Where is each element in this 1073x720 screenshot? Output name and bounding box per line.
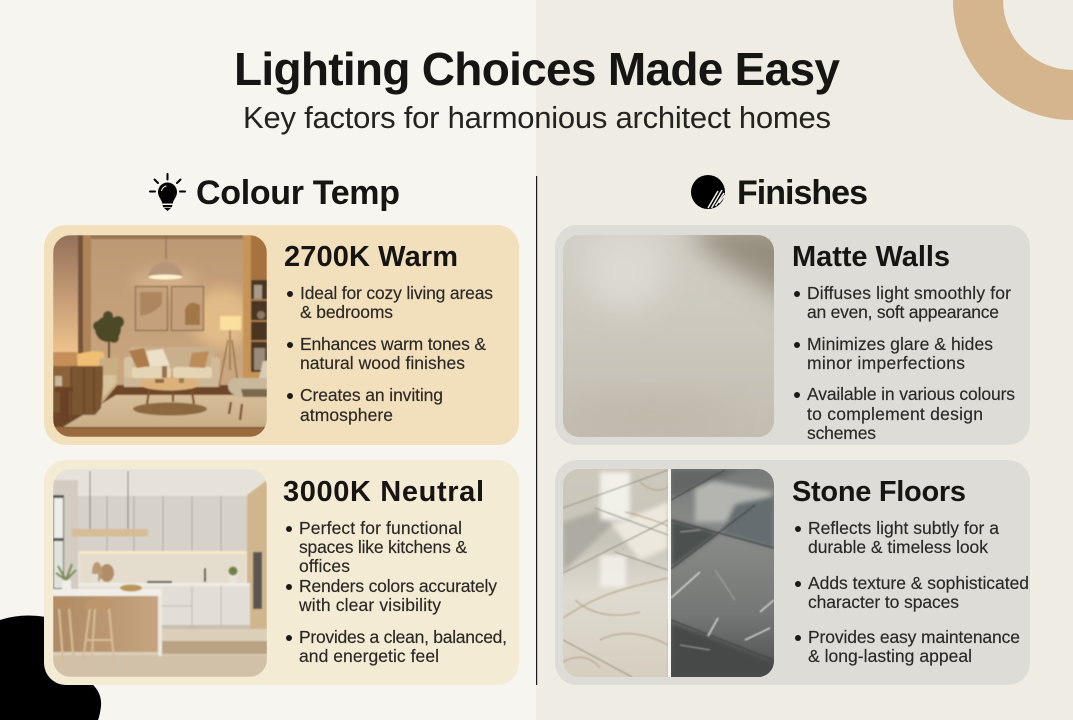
heading: finishes: Finishes [737,174,868,212]
bullet: maintenance [795,627,1020,666]
bullet: texture: character to spaces [808,592,959,612]
bullet: texture: Adds texture & sophisticated [808,573,1029,593]
heading: 2700K Warm [284,241,458,273]
bullet: balanced feel: and energetic feel [299,646,439,666]
bullet: maintenance: Provides easy maintenance [808,627,1020,647]
bullet list [795,518,1029,666]
panel: stone floors [555,460,1030,685]
decorative ring top right [953,0,1073,120]
bullet: functional spaces [286,518,467,576]
panel: 3000K neutral [44,460,519,685]
image: matte wall texture [563,235,774,437]
bullet: warm tones: Enhances warm tones & [300,334,486,354]
bullet: functional spaces: spaces like kitchens & [299,537,467,557]
bullet: cozy areas: & bedrooms [300,302,393,322]
icon: shaded sphere [691,175,725,209]
armchair [259,361,267,381]
image: kitchen [53,469,267,677]
bullet: minimizes glare [794,334,993,373]
bullet: balanced feel [286,627,507,666]
title: Lighting Choices Made Easy [234,43,840,95]
bullet: diffuses light: an even, soft appearance [807,302,999,322]
subtitle: Key factors for harmonious architect homes [243,100,831,135]
panel: matte walls [555,225,1030,445]
bullet: accurate colours: with clear visibility [298,595,441,615]
bullet: minimizes glare: Minimizes glare & hides [807,334,993,354]
bullet: minimizes glare: minor imperfections [807,353,965,373]
bullet: accurate colours: Renders colors accurately [299,576,497,596]
bullet: various colours: to complement design [807,404,983,424]
bullet: maintenance: & long-lasting appeal [808,646,972,666]
heading: 3000K Neutral [283,476,484,508]
bullet: atmosphere [287,385,443,425]
bullet: diffuses light: Diffuses light smoothly for [807,283,1011,303]
bullet: atmosphere: Creates an inviting [300,385,443,405]
center divider [536,176,537,685]
icon: light bulb [150,174,185,211]
bullet: cozy areas [287,283,493,322]
bullet: functional spaces: Perfect for functional [299,518,462,538]
bullet list [794,283,1015,443]
heading: colour temp: Colour Temp [196,174,400,212]
bullet: various colours: schemes [807,423,876,443]
bullet: diffuses light [794,283,1011,322]
bullet: cozy areas: Ideal for cozy living areas [300,283,493,303]
bullet: accurate colours [286,576,497,615]
slate half [671,469,774,677]
floor [53,384,234,428]
bullet: atmosphere: atmosphere [300,405,393,425]
bullet: functional spaces: offices [299,556,350,576]
bullet list [286,518,507,666]
bullet: balanced feel: Provides a clean, balanced, [299,627,507,647]
decorative black blob bottom left [0,616,101,720]
bullet: warm tones: natural wood finishes [300,353,465,373]
sofa [130,347,214,371]
bullet: reflects light: Reflects light subtly for a [808,518,999,538]
image: warm living room [53,235,267,437]
left sofa [53,352,78,367]
bullet list [287,283,493,425]
heading: Stone Floors [792,476,966,508]
bullet: various colours [794,384,1015,443]
floor lamp [220,316,241,330]
image: marble and slate floors [563,469,774,677]
bullet: various colours: Available in various colours [807,384,1015,404]
heading: Matte Walls [792,241,950,273]
bullet: reflects light [795,518,999,557]
bullet: reflects light: durable & timeless look [808,537,988,557]
bullet: texture [795,573,1029,612]
marble half [563,469,668,677]
bullet: warm tones [287,334,486,373]
panel: 2700K warm [44,225,519,445]
